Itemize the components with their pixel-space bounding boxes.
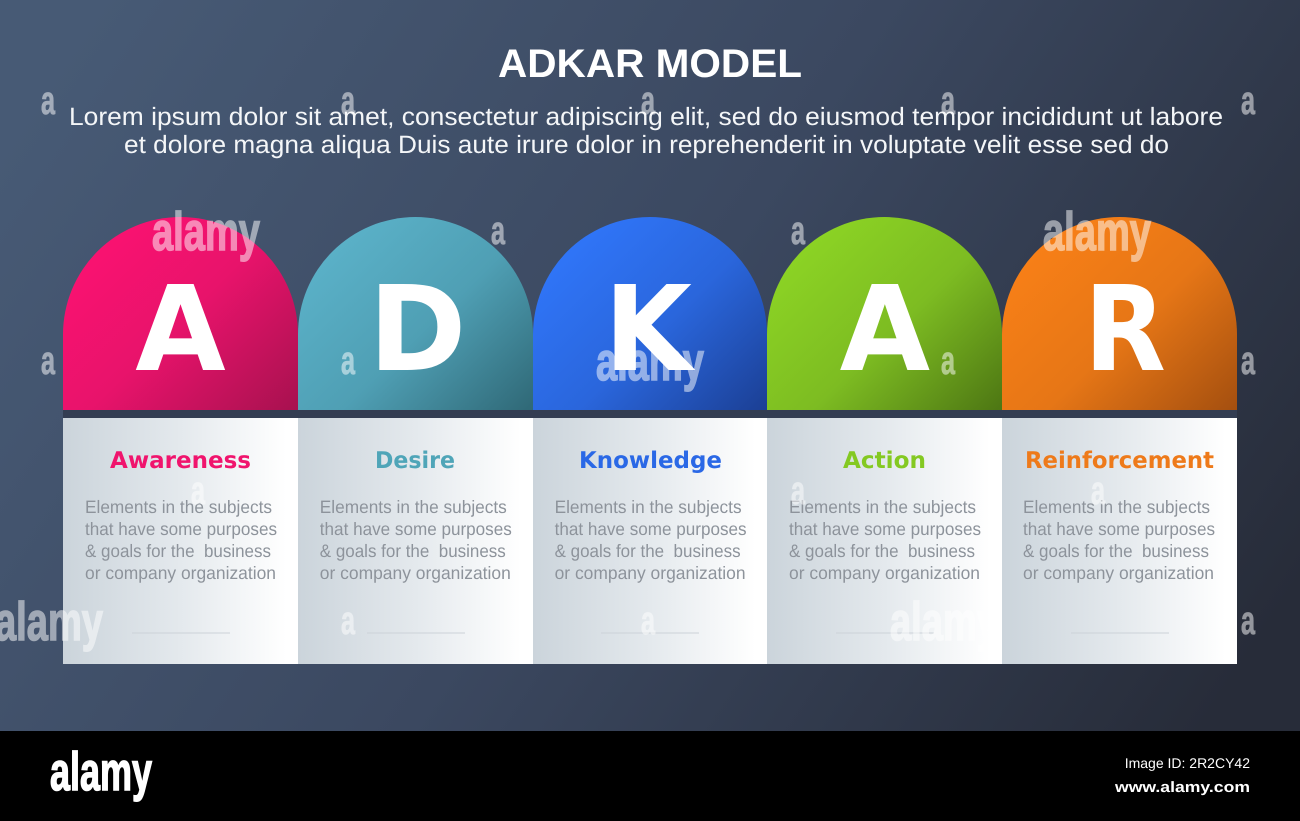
watermarks: a: [1241, 339, 1255, 383]
card: Knowledge: Elements in the subjects: [555, 497, 742, 517]
watermarks: a: [1091, 469, 1105, 513]
watermarks: a: [941, 79, 955, 123]
card: Action: [767, 418, 1002, 664]
watermarks: a: [941, 339, 955, 383]
dome: R: [1002, 217, 1237, 410]
watermarks: a: [41, 79, 55, 123]
card: Awareness: & goals for the business: [85, 541, 271, 561]
watermarks: alamy: [890, 592, 998, 652]
dome: A: A: [840, 260, 930, 398]
title: ADKAR MODEL: [498, 42, 802, 86]
subtitle text block: [69, 103, 1223, 159]
card: Awareness: that have some purposes: [85, 519, 277, 539]
watermarks: [0, 79, 1255, 652]
card: Knowledge: Knowledge: [579, 448, 722, 474]
watermarks: a: [791, 209, 805, 253]
watermarks: a: [1241, 599, 1255, 643]
watermarks: a: [641, 79, 655, 123]
card: Desire: [298, 418, 533, 664]
card: Action: Action: [843, 448, 926, 474]
dome: A: [63, 217, 298, 410]
card: Action: & goals for the business: [789, 541, 975, 561]
footer image id: Image ID: 2R2CY42: [1125, 755, 1250, 771]
dome: K: K: [604, 260, 696, 398]
watermarks: a: [341, 79, 355, 123]
card: Desire: Elements in the subjects: [320, 497, 507, 517]
card: Awareness: [63, 418, 298, 664]
watermarks: a: [41, 339, 55, 383]
card: Reinforcement: & goals for the business: [1023, 541, 1209, 561]
card: Reinforcement: or company organization: [1023, 563, 1214, 583]
panel: Awareness: [63, 217, 298, 664]
panel: Knowledge: [533, 217, 767, 664]
card: Knowledge: & goals for the business: [555, 541, 741, 561]
watermarks: alamy: [152, 202, 260, 262]
card: Action: or company organization: [789, 563, 980, 583]
panel: Action: [767, 217, 1002, 664]
watermarks: a: [341, 339, 355, 383]
card: Reinforcement: [1002, 418, 1237, 664]
watermarks: a: [1241, 79, 1255, 123]
dome: D: D: [369, 260, 466, 398]
footer url: www.alamy.com: [1114, 779, 1250, 796]
card: Desire: or company organization: [320, 563, 511, 583]
subtitle text block: et dolore magna aliqua Duis aute irure dolor in reprehenderit in voluptate velit esse sed do: [124, 131, 1169, 159]
footer logo: alamy: [50, 742, 152, 802]
footer bar: [0, 731, 1300, 821]
watermarks: a: [341, 599, 355, 643]
card: Action: Elements in the subjects: [789, 497, 976, 517]
card: Reinforcement: that have some purposes: [1023, 519, 1215, 539]
watermarks: alamy: [596, 332, 704, 392]
card: Reinforcement: Reinforcement: [1025, 448, 1214, 474]
card: Awareness: Awareness: [110, 448, 251, 474]
dome: D: [298, 217, 533, 410]
watermarks: a: [191, 469, 205, 513]
watermarks: alamy: [1043, 202, 1151, 262]
card: Awareness: Elements in the subjects: [85, 497, 272, 517]
card: Desire: & goals for the business: [320, 541, 506, 561]
card: Knowledge: [533, 418, 767, 664]
divider band: [63, 410, 1237, 418]
dome: A: [767, 217, 1002, 410]
panel: Desire: [298, 217, 533, 664]
card: Desire: Desire: [375, 448, 455, 474]
card: Reinforcement: Elements in the subjects: [1023, 497, 1210, 517]
card: Desire: that have some purposes: [320, 519, 512, 539]
dome: K: [533, 217, 767, 410]
watermarks: a: [491, 209, 505, 253]
card: Action: that have some purposes: [789, 519, 981, 539]
subtitle text block: Lorem ipsum dolor sit amet, consectetur adipiscing elit, sed do eiusmod tempor incididunt ut labore: [69, 103, 1223, 131]
card: Awareness: or company organization: [85, 563, 276, 583]
card: Knowledge: or company organization: [555, 563, 746, 583]
card: Knowledge: that have some purposes: [555, 519, 747, 539]
watermarks: a: [791, 469, 805, 513]
dome: A: A: [135, 260, 226, 398]
watermarks: a: [641, 599, 655, 643]
panel: Reinforcement: [1002, 217, 1237, 664]
dome: R: R: [1084, 260, 1166, 398]
